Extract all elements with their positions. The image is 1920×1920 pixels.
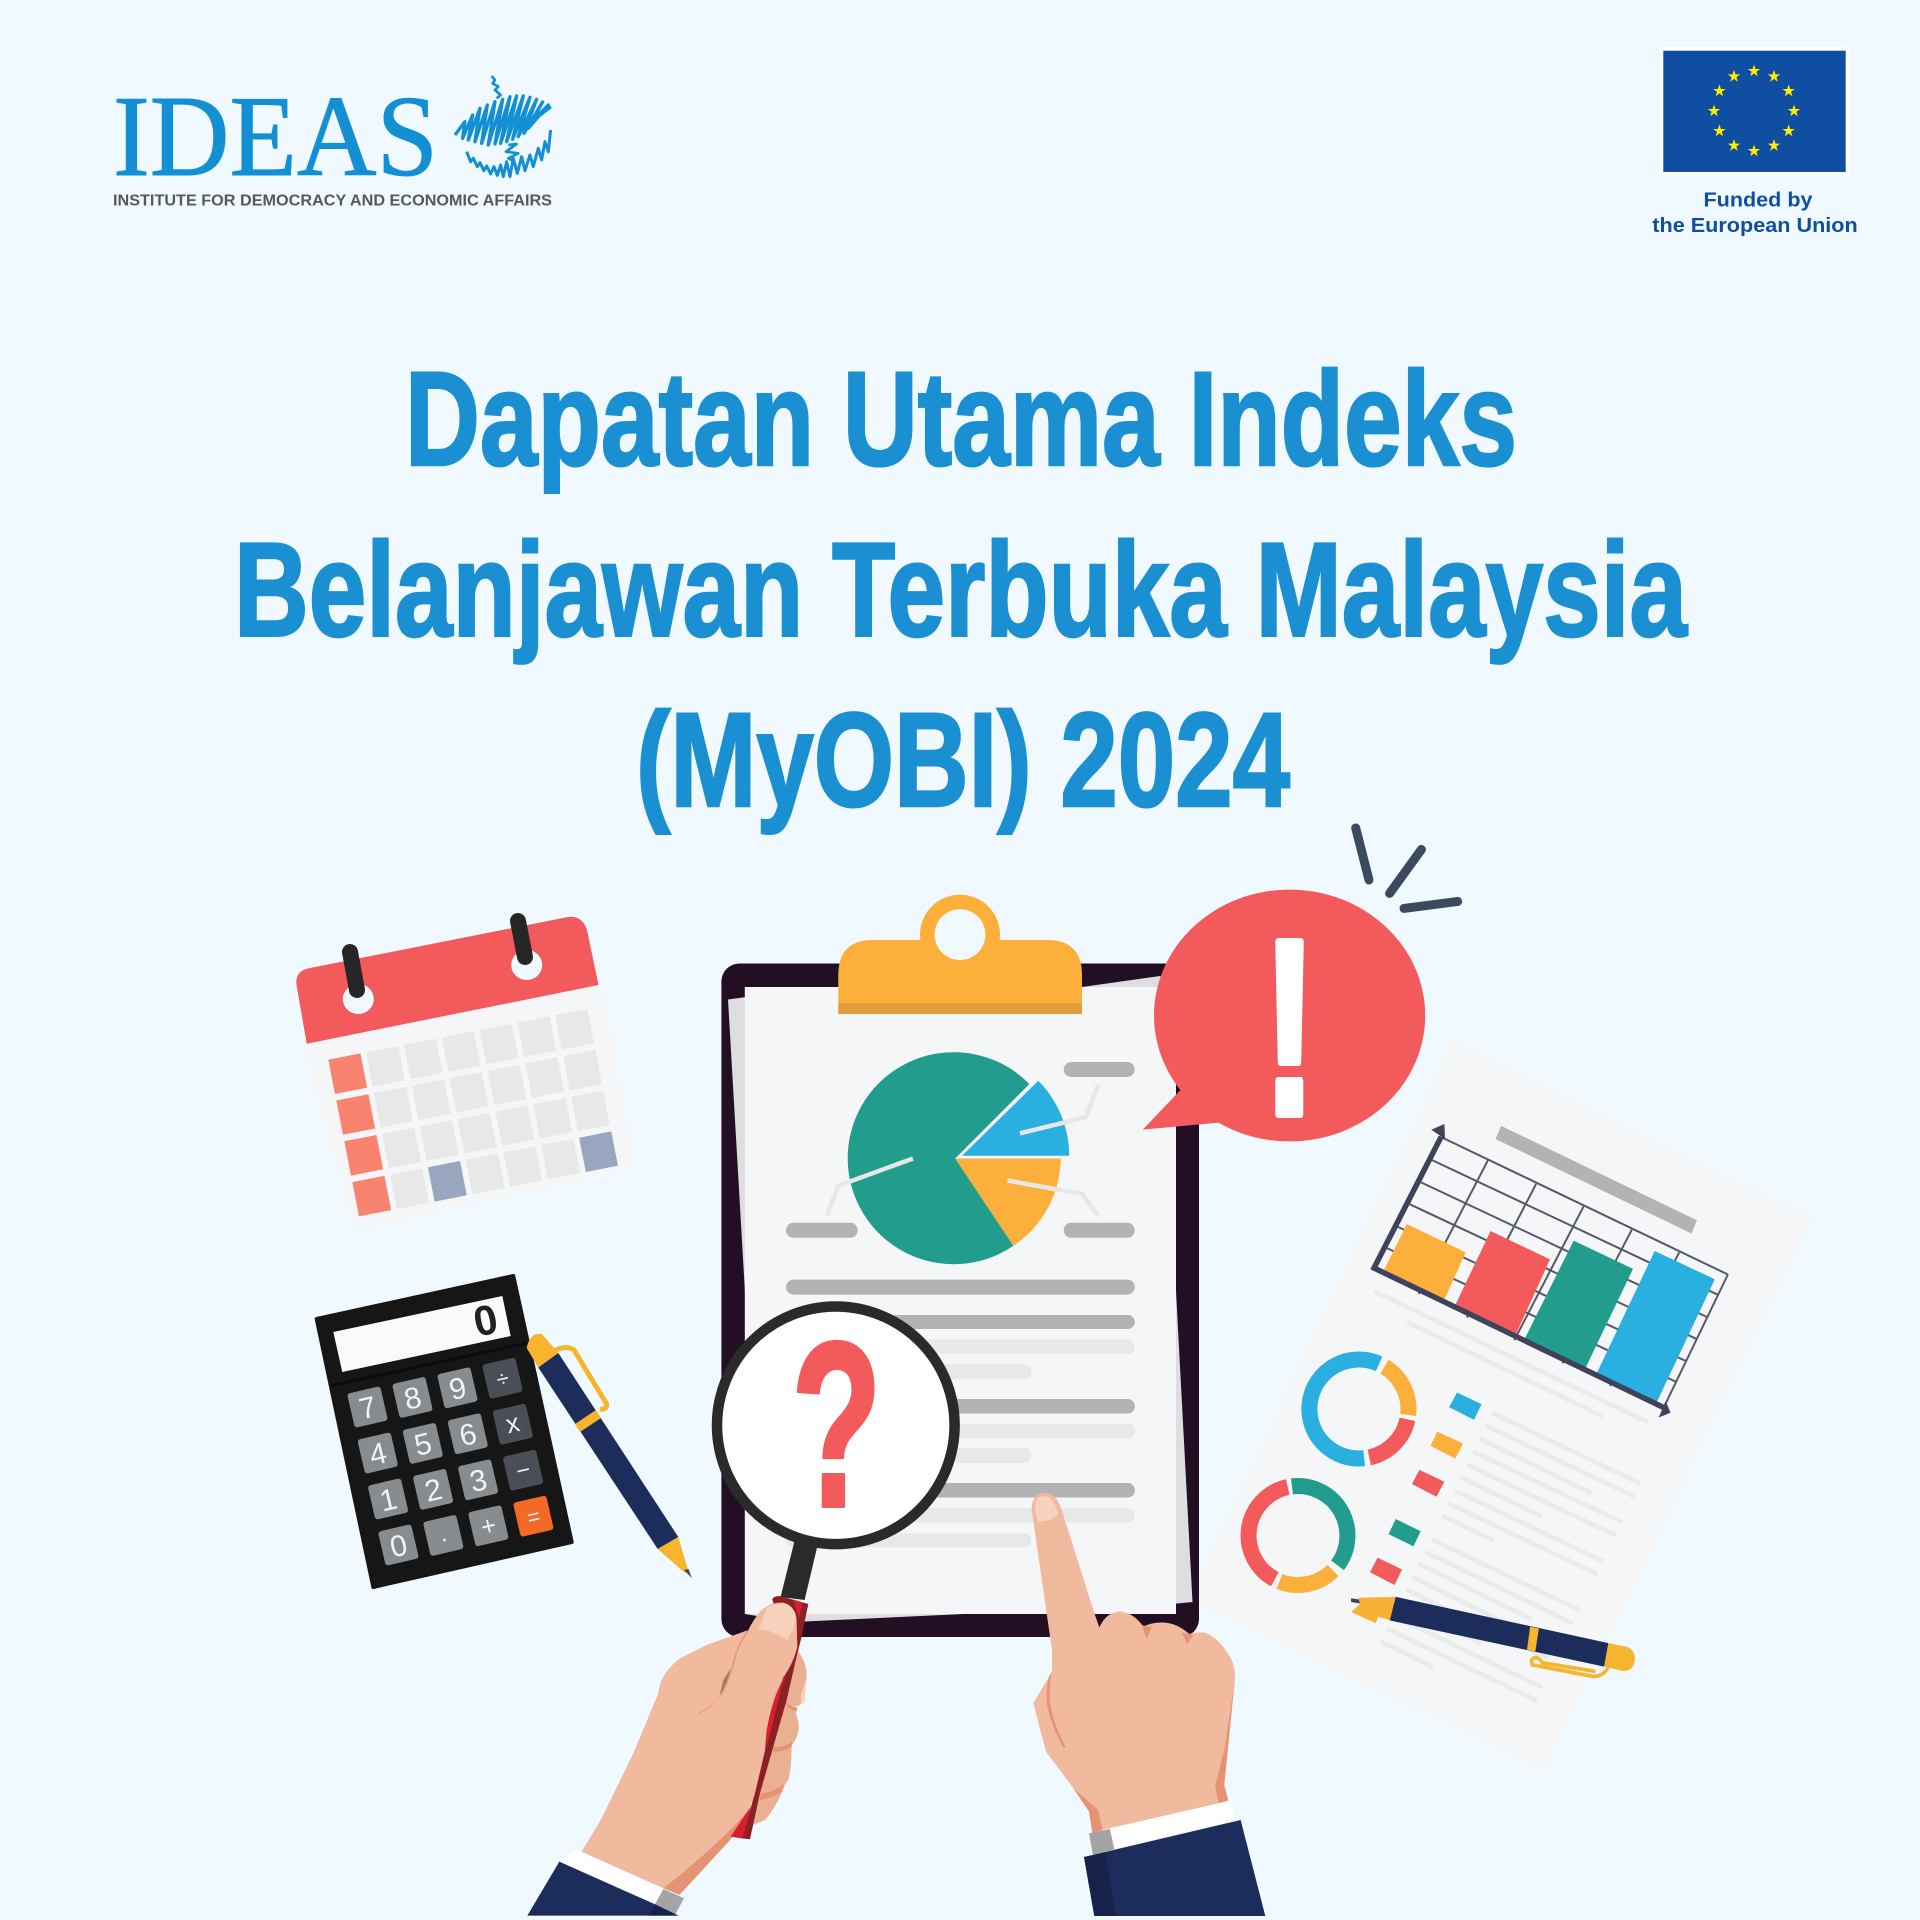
pie chart: [827, 1052, 1098, 1264]
chart grid: [1386, 1137, 1728, 1406]
chart bars: [1384, 1224, 1715, 1402]
Funded by caption: the European Union: [1652, 214, 1858, 237]
shirt cuff: [1110, 1801, 1235, 1849]
paper sheet: [745, 987, 1176, 1614]
report text lines: [1375, 1292, 1648, 1701]
jacket sleeve: [527, 1862, 678, 1916]
shirt cuff: [560, 1850, 663, 1904]
icon: scribbled dove: [455, 76, 551, 177]
chart axes: [1374, 1124, 1670, 1418]
donut chart: bottom: [1249, 1486, 1347, 1585]
Funded by caption: [1652, 188, 1858, 237]
right hand pointing: [1032, 1493, 1265, 1916]
IDEAS full name: INSTITUTE FOR DEMOCRACY AND ECONOMIC AFFAIRS: [113, 192, 552, 210]
pie labels: [786, 1062, 1135, 1238]
title: (MyOBI) 2024: [636, 686, 1290, 835]
jacket sleeve: [1084, 1820, 1265, 1916]
thumb crease: [694, 1629, 750, 1717]
hand skin: [1032, 1493, 1235, 1830]
Funded by caption: Funded by: [1704, 188, 1813, 212]
calculator keys: +: [478, 1509, 499, 1542]
bar chart: [1374, 1124, 1728, 1418]
lens handle: [781, 1535, 820, 1600]
icon: pen beside calculator: [527, 1334, 692, 1578]
fingers behind grip: [750, 1652, 807, 1825]
calculator keys: 3: [467, 1463, 490, 1499]
icon: calculator: [317, 1276, 572, 1587]
calculator keys: 7: [356, 1391, 380, 1426]
fingernail: [1035, 1496, 1058, 1522]
document text lines: [786, 1280, 1135, 1548]
thumb nail: [758, 1603, 795, 1640]
IDEAS logo: [113, 73, 552, 210]
EU flag: [1660, 47, 1849, 175]
calculator keys: 1: [377, 1483, 400, 1518]
calendar header: [296, 917, 598, 1044]
calculator keys: 8: [401, 1381, 425, 1417]
donut chart: top: [1309, 1359, 1408, 1458]
pie leader lines: [827, 1085, 1098, 1215]
clipboard clip: [838, 895, 1082, 1014]
chart heading bar: [1495, 1126, 1697, 1234]
calculator keys: =: [524, 1503, 543, 1530]
clipboard: [721, 895, 1199, 1637]
icon: calendar: [296, 917, 631, 1227]
title: Dapatan Utama Indeks: [405, 345, 1517, 494]
calculator display: [333, 1295, 511, 1372]
calendar rings: [343, 921, 542, 1014]
wrist shadow: [663, 1808, 750, 1895]
thumb: [693, 1603, 797, 1717]
calculator keys: 4: [366, 1437, 390, 1472]
icon: alert spark lines: [1356, 828, 1458, 908]
grip of magnifier: [731, 1596, 808, 1839]
calculator keys: 0: [387, 1529, 411, 1564]
title: [234, 345, 1688, 835]
calculator keys: ÷: [494, 1365, 511, 1392]
icon: pen on report: [1351, 1597, 1635, 1676]
speech bubble with exclamation mark: [1143, 888, 1425, 1167]
calculator keys: 2: [422, 1473, 445, 1509]
exclamation mark: !: [1263, 888, 1317, 1167]
calculator keys: 9: [446, 1371, 470, 1407]
lens: [717, 1306, 955, 1544]
calculator keys: 6: [456, 1417, 480, 1453]
document: charts report: [1188, 1040, 1813, 1771]
EU funding badge: [1652, 47, 1858, 237]
left hand holding grip: [527, 1596, 808, 1916]
calculator display: 0: [469, 1295, 502, 1346]
hand shadow: [1215, 1678, 1235, 1803]
calculator keys: −: [513, 1456, 533, 1485]
magnifying glass with left hand: [527, 1293, 955, 1916]
legend swatches: [1370, 1393, 1482, 1585]
back sheets: [728, 976, 1192, 1622]
question mark: ?: [791, 1293, 882, 1556]
calendar day cells: [328, 1009, 618, 1216]
calculator keys: 5: [411, 1427, 435, 1463]
clipboard board: [721, 964, 1199, 1637]
palm: [582, 1631, 787, 1888]
calculator keys: x: [503, 1407, 522, 1439]
IDEAS wordmark: IDEAS: [113, 73, 438, 201]
calculator keys: .: [437, 1520, 449, 1548]
calculator keys: [347, 1357, 554, 1566]
